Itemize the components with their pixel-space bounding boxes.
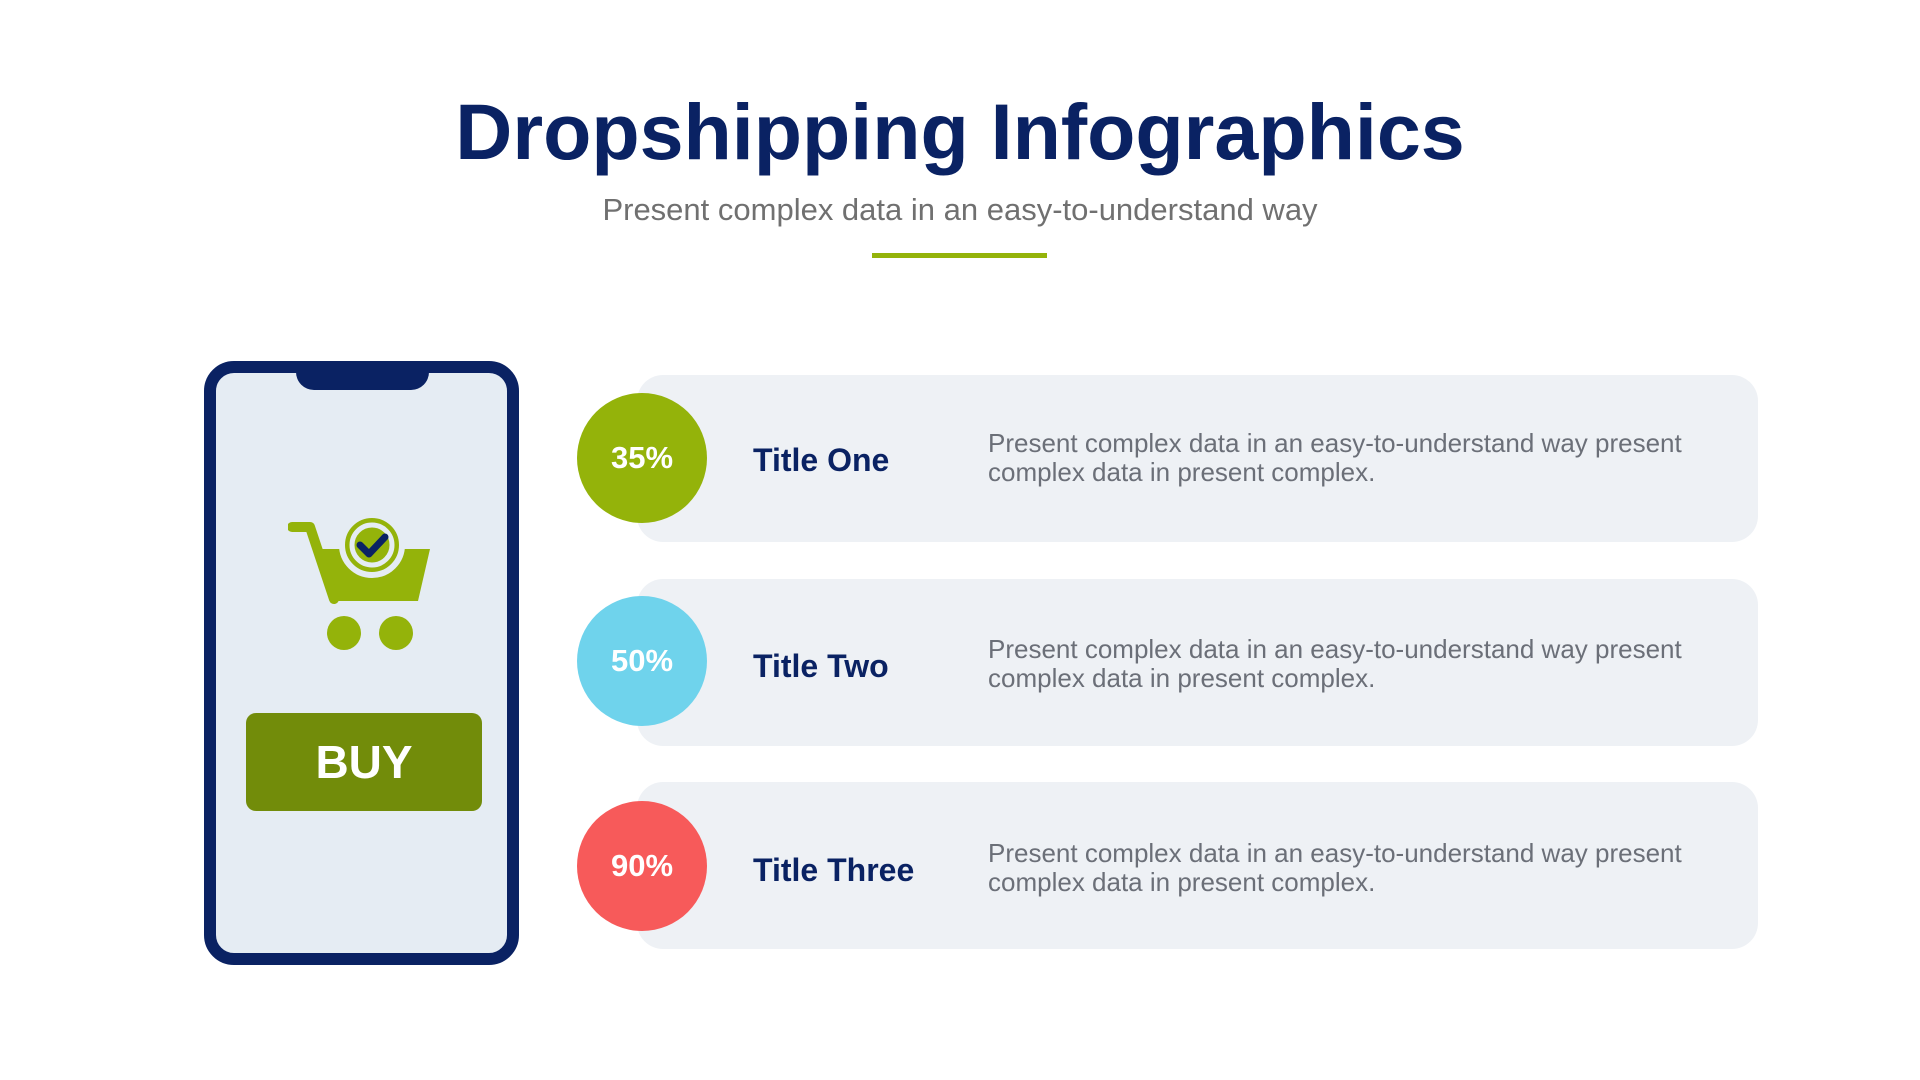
card: row 3 xyxy=(637,782,1758,949)
card: row 1 xyxy=(637,375,1758,542)
icon: shopping cart with check xyxy=(288,518,430,650)
circle: 90% xyxy=(577,801,707,931)
underline accent xyxy=(872,253,1047,258)
title one: Title One xyxy=(753,442,889,478)
description 3: Present complex data in an easy-to-understand way present complex data in present complex. xyxy=(988,838,1682,897)
BUY button xyxy=(246,713,482,811)
BUY button: BUY xyxy=(315,736,413,788)
description 1: Present complex data in an easy-to-understand way present complex data in present complex. xyxy=(988,428,1682,487)
description 2: Present complex data in an easy-to-understand way present complex data in present complex. xyxy=(988,634,1682,693)
title three: Title Three xyxy=(753,852,914,888)
title two: Title Two xyxy=(753,648,889,684)
phone illustration xyxy=(204,361,519,965)
phone notch xyxy=(296,361,429,390)
card: row 2 xyxy=(637,579,1758,746)
circle: 50%: 50% xyxy=(611,643,673,678)
circle: 35% xyxy=(577,393,707,523)
circle: 90%: 90% xyxy=(611,848,673,883)
title: Dropshipping Infographics xyxy=(455,87,1465,176)
circle: 35%: 35% xyxy=(611,440,673,475)
subtitle: Present complex data in an easy-to-understand way xyxy=(602,192,1318,227)
circle: 50% xyxy=(577,596,707,726)
